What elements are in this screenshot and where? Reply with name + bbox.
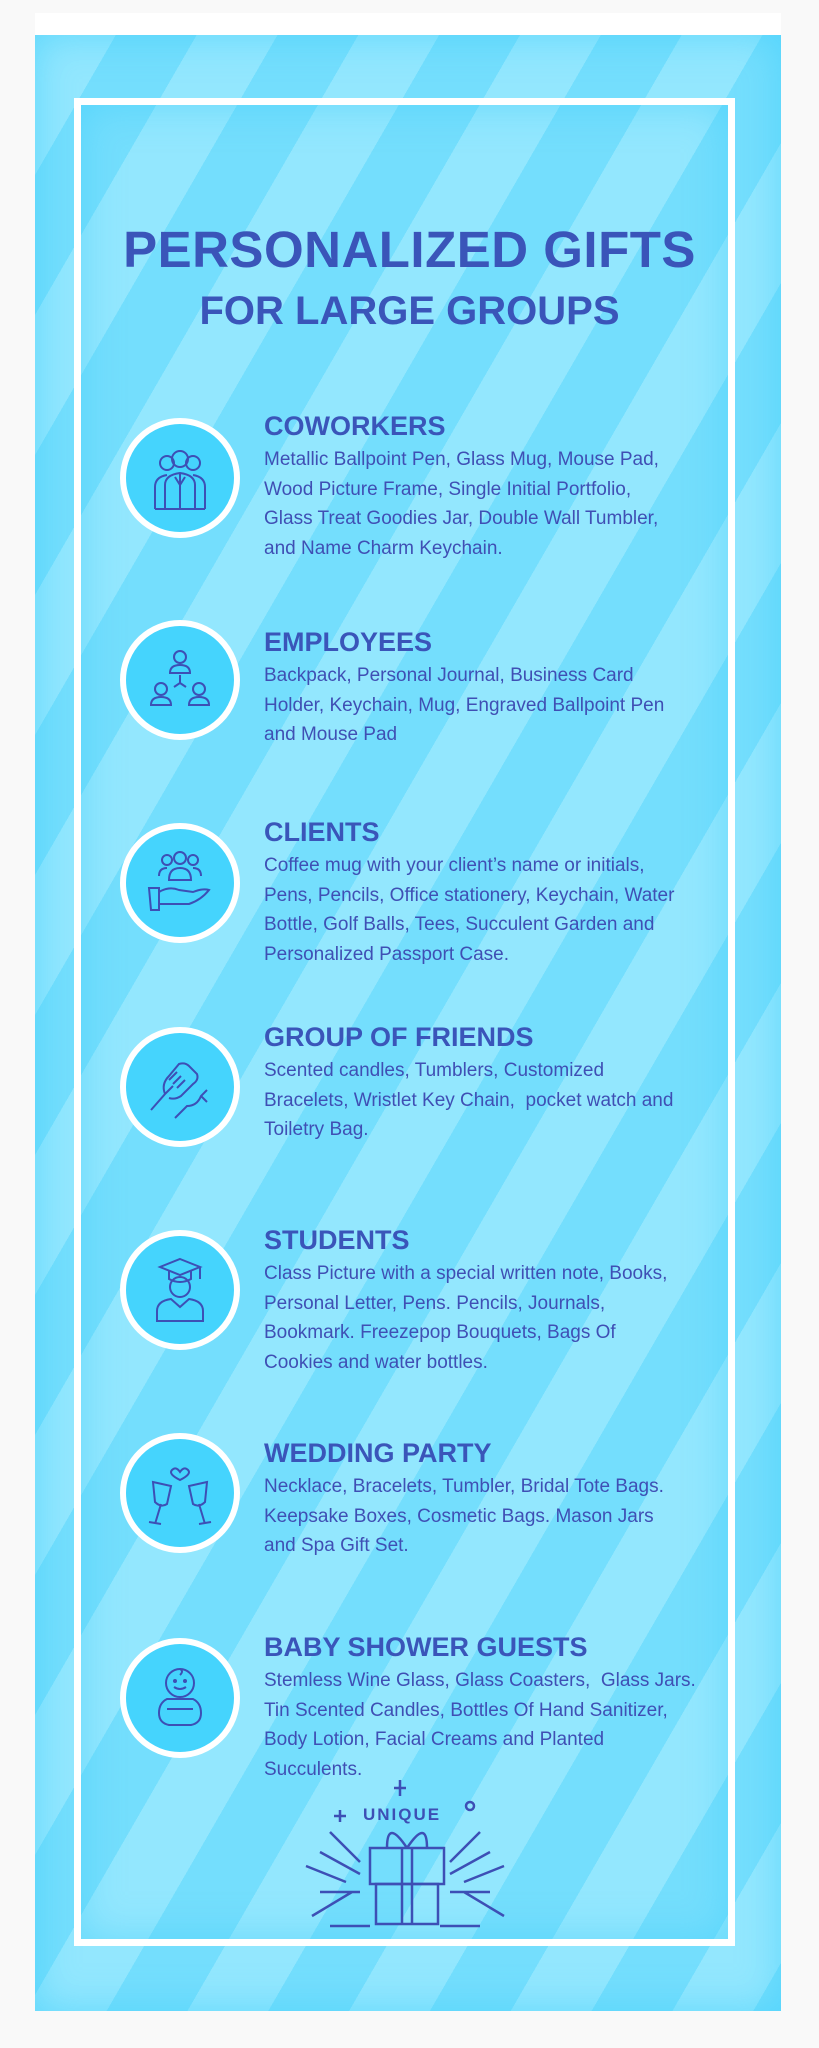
text: students: Class Picture with a special written note, Books,: [264, 1263, 667, 1284]
text: coworkers: Metallic Ballpoint Pen, Glass Mug, Mouse Pad,: [264, 449, 659, 470]
text: coworkers: COWORKERS: [264, 411, 446, 441]
text: baby shower guests: Body Lotion, Facial Creams and Planted: [264, 1729, 604, 1750]
text: clients: Pens, Pencils, Office stationery, Keychain, Water: [264, 884, 674, 906]
text: clients: Bottle, Golf Balls, Tees, Succulent Garden and: [264, 914, 654, 935]
icon: unique gift: [306, 1780, 505, 1928]
text: group of friends: Bracelets, Wristlet Key Chain, pocket watch and: [264, 1090, 673, 1110]
text: students: Personal Letter, Pens. Pencils, Journals,: [264, 1292, 605, 1314]
text: baby shower guests: [264, 1632, 696, 1780]
text: wedding party: Keepsake Boxes, Cosmetic Bags. Mason Jars: [264, 1506, 654, 1526]
text: group of friends: [264, 1022, 673, 1140]
icon: clients: [120, 823, 240, 943]
text: students: [264, 1225, 667, 1372]
text: employees: [264, 627, 664, 745]
text: students: STUDENTS: [264, 1225, 410, 1255]
icon: employees: [120, 620, 240, 740]
text: clients: Personalized Passport Case.: [264, 944, 509, 964]
subtitle: FOR LARGE GROUPS: [199, 289, 620, 333]
text: baby shower guests: Stemless Wine Glass, Glass Coasters, Glass Jars.: [264, 1670, 696, 1691]
icon: group of friends: [120, 1027, 240, 1147]
icon: students: [120, 1230, 240, 1350]
text: employees: Holder, Keychain, Mug, Engraved Ballpoint Pen: [264, 694, 664, 716]
text: group of friends: Toiletry Bag.: [264, 1119, 369, 1140]
title: PERSONALIZED GIFTS: [123, 221, 696, 278]
text: coworkers: and Name Charm Keychain.: [264, 538, 503, 558]
icon: unique gift: UNIQUE: [363, 1805, 441, 1824]
text: wedding party: Necklace, Bracelets, Tumbler, Bridal Tote Bags.: [264, 1476, 664, 1497]
text: employees: Backpack, Personal Journal, Business Card: [264, 665, 634, 686]
text: baby shower guests: Succulents.: [264, 1758, 362, 1780]
text: students: Bookmark. Freezepop Bouquets, Bags Of: [264, 1322, 616, 1343]
text: wedding party: WEDDING PARTY: [264, 1438, 492, 1468]
text: wedding party: and Spa Gift Set.: [264, 1535, 409, 1556]
icon: wedding party: [120, 1433, 240, 1553]
text: employees: EMPLOYEES: [264, 627, 432, 657]
text: coworkers: Wood Picture Frame, Single Initial Portfolio,: [264, 478, 631, 500]
icon: coworkers: [120, 418, 240, 538]
text: wedding party: [264, 1438, 664, 1556]
text: group of friends: Scented candles, Tumblers, Customized: [264, 1060, 604, 1081]
text: clients: Coffee mug with your client’s name or initials,: [264, 855, 645, 876]
text: coworkers: Glass Treat Goodies Jar, Double Wall Tumbler,: [264, 508, 658, 529]
text: baby shower guests: BABY SHOWER GUESTS: [264, 1632, 588, 1662]
text: coworkers: [264, 411, 659, 558]
text: baby shower guests: Tin Scented Candles, Bottles Of Hand Sanitizer,: [264, 1700, 668, 1720]
text: employees: and Mouse Pad: [264, 724, 397, 745]
icon: baby: [120, 1638, 240, 1758]
text: clients: [264, 817, 674, 964]
text: clients: CLIENTS: [264, 817, 380, 847]
text: group of friends: GROUP OF FRIENDS: [264, 1022, 534, 1052]
text: students: Cookies and water bottles.: [264, 1352, 488, 1372]
